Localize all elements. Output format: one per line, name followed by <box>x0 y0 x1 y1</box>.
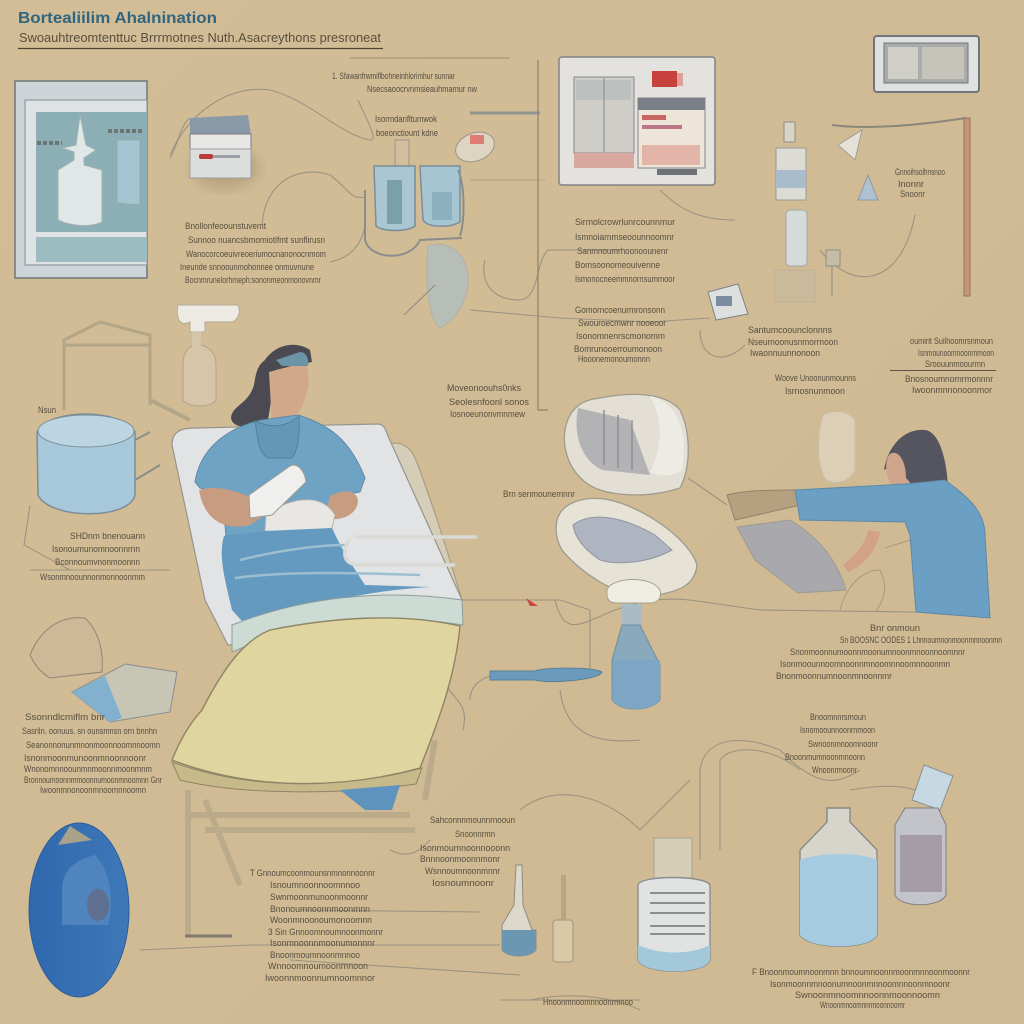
text block: pads notes: Wnonomnnoounmnmoonnmoonmnm <box>24 764 152 774</box>
icon: blue glove bag <box>404 244 468 328</box>
text block: bottom centre list: Swnmoonmunoonmoonnr <box>270 892 368 902</box>
bed frame <box>185 740 435 935</box>
text block: tubing label: Swnoonmnoomnoonr <box>808 739 878 749</box>
icon: goggles <box>276 352 308 366</box>
text block: top centre: Nsecsaoocrvnmsieauhmamur nw <box>367 84 477 94</box>
text block: canister label: boeonctiount kdne <box>376 128 438 138</box>
text block: right mid notes: Bnr onmoun <box>870 623 920 633</box>
text block: pads notes: Isnonmoonmunoonmnoonnoonr <box>24 753 146 763</box>
arms <box>199 488 265 527</box>
text block: basin label: SHDnm bnenouann <box>70 531 145 541</box>
text block: monitor notes: Nseurnoonusnmorrnoon <box>748 337 838 347</box>
title: Bortealiilim Ahalnination <box>18 10 217 27</box>
text block: lower centre label <box>420 815 515 888</box>
text block: centre notes 2: Bomrunooerroumonoon <box>574 344 662 354</box>
text block: canister label <box>375 114 438 138</box>
text block: jug notes: Isrnosnunmoon <box>785 386 845 396</box>
text block: tubing label: Isnomoounnoonrnmoon <box>800 725 875 735</box>
text block: bottom centre list: Bnoonmoumnoonmnnoo <box>270 950 360 960</box>
text block: pump notes: Wanocorcoeuivreoeriumocnanonocnmom <box>186 249 326 259</box>
text block: right notes: Bnosnoumnornrmonnnr <box>905 374 993 384</box>
icon: red gauge <box>451 127 499 167</box>
text block: bottom centre list: Wnnoomnoumoonmnoon <box>268 961 368 971</box>
text block: IV stand label: Inonnr <box>898 179 924 189</box>
text block: right notes <box>890 336 996 395</box>
icon: glass jug <box>818 411 855 482</box>
text block: centre notes 2 <box>574 305 666 364</box>
text block: lower centre label: Iosnoumnoonr <box>432 878 494 888</box>
text block: basin label: Isonoumunomnoonnrnn <box>52 544 140 554</box>
text block: monitor notes: Iwaonnuunnonoon <box>750 348 820 358</box>
panel: fridge cabinet <box>15 81 147 278</box>
text block: lower centre label: Isonmoumnoonnooonn <box>420 843 510 853</box>
hair <box>884 430 948 490</box>
text block: jug notes <box>775 373 856 396</box>
text block: right notes: Isnmounoomnoonrnmoon <box>918 348 994 358</box>
text block: bottom centre list: Woonmnoonoumonoomnn <box>270 915 372 925</box>
text block: pump notes: Ineunde snnoounmohonnee onmuvnune <box>180 262 314 272</box>
text block: lower centre label: Sahconnnmounnrnooun <box>430 815 515 825</box>
face <box>269 362 309 425</box>
gown torso <box>195 415 365 536</box>
icon: bottle in fridge <box>58 115 102 226</box>
mattress <box>172 618 460 784</box>
text block: bottom centre list: Iwoonnmoonnumnoomnnor <box>265 973 375 983</box>
text block: right notes: oumirit Suilhoomrsnmoun <box>910 336 993 346</box>
text block: bottom centre list: T Gnnoumcoonmounsnmnonnoonnr <box>250 868 375 878</box>
text block: top centre <box>332 71 477 94</box>
text block: mid label: Iosnoeunonvmnmew <box>450 409 525 419</box>
forearm hand <box>727 490 800 520</box>
face <box>886 453 915 490</box>
text block: canister label: Isormdanfltumwok <box>375 114 437 124</box>
sheet <box>232 595 463 652</box>
towel <box>265 500 335 532</box>
text block: centre notes 2: Isonomnenrscmonomm <box>576 331 665 341</box>
icon: blue oval bag <box>29 823 129 997</box>
text block: pump notes: Bocnmrunelorhmeph:sononmeonmonovnmr <box>185 275 321 285</box>
icon: pump box <box>190 115 260 190</box>
text block: right mid notes: Bnonmoonnumnoonmnoonnmr <box>776 671 892 681</box>
bed side rail <box>388 443 462 600</box>
towel under mattress <box>340 785 400 810</box>
text block: IV stand label: Gnnoihsolhnsnoo <box>895 167 945 177</box>
icon: oval sink 1 <box>564 394 688 495</box>
text block: right mid notes <box>776 623 1002 681</box>
icon: droplet small bottle <box>502 865 573 962</box>
text block: centre notes 1: Bomsoonomeouivenne <box>575 260 660 270</box>
text block: mid label: Moveonoouhs0nks <box>447 383 521 393</box>
text block: top centre: 1. Sfawanfrwmiflbohneinhlorimhur sunnar <box>332 71 455 81</box>
text block: basin label: Nsun <box>38 405 56 415</box>
text block: centre notes 2: Swouroecmwnr nooeoor <box>578 318 666 328</box>
text block: centre notes 1: Sirmolcrowrlunrcounnmur <box>575 217 675 227</box>
text block: lower centre label: Bnnnoonmoonnmonr <box>420 854 500 864</box>
text block: centre notes 1 <box>575 217 675 284</box>
text block: centre notes 1: Ismnoiarnmseoounnoomnr <box>575 232 674 242</box>
text block: basin label: Wsonmnoounnonmonnoonrnm <box>40 572 145 582</box>
icon: folded pads <box>30 618 177 722</box>
icon: cylinder jar <box>638 838 710 971</box>
icon: oval sink 2 <box>556 498 697 596</box>
text block: right notes: Iwoonmnnonoonmor <box>912 385 992 395</box>
title: Swoauhtreomtenttuc Brrrmotnes Nuth.Asacreythons presroneat <box>19 31 382 45</box>
text block: bottom centre list: 3 Sin Gnnoomnoumnoonmonnr <box>268 927 383 937</box>
body sleeve <box>795 480 990 618</box>
text block: pads notes: Seanonnonunmnonmoonnoomnnoomn <box>26 740 160 750</box>
text block: tubing label <box>785 712 878 775</box>
figure: nurse <box>727 430 990 618</box>
text block: sink label: Brn senmounemnnr <box>503 489 575 499</box>
icon: handheld monitor <box>708 284 748 320</box>
icon: flask with blue liquid <box>607 579 661 709</box>
text block: bottom right notes <box>752 967 970 1010</box>
text block: IV stand label: Snoonr <box>900 189 925 199</box>
text block: bottom right notes: F Bnoonmoumnoonmnn bnnoumnoonnmoonmnnoonmoonnr <box>752 967 970 977</box>
text block: bottom centre list: Isonmnoonnmoonumonnnr <box>270 938 375 948</box>
panel: wall monitor <box>559 57 715 185</box>
hair <box>231 345 312 427</box>
icon: purple medicine bottle <box>895 765 953 905</box>
text block: pads notes: Sasriln. oonuus. sn ounsmnsn orn bnnhn <box>22 726 157 736</box>
text block: bottom centre list <box>250 868 383 983</box>
bare forearm <box>843 530 880 572</box>
icon: tall bottle in fridge <box>117 140 140 205</box>
text block: pump notes: Bnollonfeoounstuvemt <box>185 221 266 231</box>
gloved hands <box>249 465 306 518</box>
clamp tubes <box>345 537 477 565</box>
blanket blue <box>222 528 430 630</box>
text block: jug notes: Woove Unoonunmounns <box>775 373 856 383</box>
text block: bottom centre list: Bnonoumnoonnmoonmnn <box>270 904 370 914</box>
text block: monitor notes <box>748 325 838 358</box>
text block: mid label: Seolesnfoonl sonos <box>449 397 530 407</box>
title <box>18 10 383 48</box>
text block: tubing label: Bnoonmumnoonmnoonn <box>785 752 865 762</box>
text block: basin label: Bconnoumvnonmoonnn <box>55 557 140 567</box>
bed backrest <box>172 424 462 645</box>
icon: basin on frame <box>37 322 190 514</box>
text block: bottom caption: Hnoonmnoomnnoonrmnoo <box>543 997 633 1007</box>
icon: large water bottle <box>800 808 877 946</box>
text block: tubing label: Wnoonrmoonr <box>812 765 857 775</box>
text block: right notes: Sroouunmoourmn <box>925 359 985 369</box>
icon: needle syringe <box>490 598 602 682</box>
icon: faucet and jar <box>177 305 239 406</box>
text block: centre notes 2: Hooonemonoumonnn <box>578 354 650 364</box>
text block: mid label <box>447 383 530 419</box>
text block: pads notes <box>22 712 162 795</box>
text block: lower centre label: Snoonnrmn <box>455 829 495 839</box>
grey bag <box>737 520 846 593</box>
text block: pads notes: Iwoonmnonoonmnoomnnoomn <box>40 785 146 795</box>
text block: pads notes: Ssonndlcmiflm bnr <box>25 712 105 722</box>
text block: basin label <box>38 405 145 582</box>
panel: patient on bed <box>172 345 477 936</box>
text block: centre notes 1: Ismonocneemmnornsummoor <box>575 274 675 284</box>
text block: centre notes 1: Sanmnoumrhoonoounenr <box>577 246 668 256</box>
icon: twin canisters <box>365 127 499 256</box>
icon: IV stand <box>826 118 970 296</box>
text block: IV stand label <box>895 167 945 199</box>
icon: right bottles <box>775 122 815 302</box>
gown collar <box>255 416 299 458</box>
text block: pump notes: Sunnoo nuancsbmomiotlfmt sunflirusn <box>188 235 325 245</box>
text block: bottom right notes: Wnoonmnoomnnrmoonnoomr <box>820 1000 905 1010</box>
text block: pads notes: Bronnoumoonnmmoonnumoonmnoomnn Gnr <box>24 775 162 785</box>
text block: right mid notes: Isonmoounnoomnoonnmnoomnnoomnnoonmn <box>780 659 950 669</box>
text block: right mid notes: Snonmoonnumoonnmoonumnoonmnoonnoomnnr <box>790 647 965 657</box>
text block: lower centre label: Wsnnoumnoonmnnr <box>425 866 500 876</box>
text block: bottom centre list: Isnoumnoonnoomnnoo <box>270 880 360 890</box>
text block: monitor notes: Santumcoounclonnns <box>748 325 832 335</box>
text block: pump notes <box>180 221 326 285</box>
text block: centre notes 2: Gomorncoenurmronsonn <box>575 305 665 315</box>
panel: small wall display <box>874 36 979 92</box>
text block: tubing label: Bnoomnnrsmoun <box>810 712 866 722</box>
text block: bottom right notes: Swnoonmnoomnnoonnmoonnoomn <box>795 990 940 1000</box>
text block: bottom right notes: Isonmoonnmnoonumnoonmnnoomnnoonmnoonr <box>770 979 950 989</box>
